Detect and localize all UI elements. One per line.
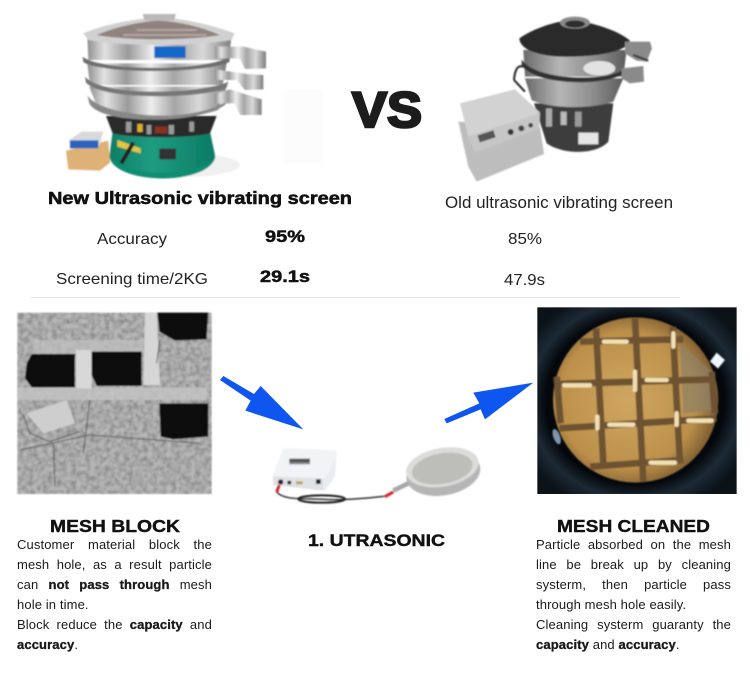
text block: mesh cleaned description: Cleaning systerm guaranty the <box>536 617 731 632</box>
heading: old screen: Old ultrasonic vibrating screen <box>445 194 673 212</box>
text block: mesh cleaned description: Particle absorbed on the mesh <box>536 537 731 552</box>
photo: ultrasonic generator and sieve <box>273 442 484 503</box>
heading: new screen: New Ultrasonic vibrating screen <box>48 188 352 208</box>
text block: mesh block description: hole in time. <box>17 597 89 612</box>
value: old screening time: 47.9s <box>504 272 545 289</box>
box and controller <box>66 141 110 171</box>
photo: cleaned mesh <box>537 307 737 494</box>
label: screening time: Screening time/2KG <box>56 271 208 288</box>
photo: new ultrasonic vibrating screen <box>66 14 323 178</box>
tiers <box>87 37 232 60</box>
text block: mesh block description: Block reduce the capacity and <box>17 617 212 632</box>
heading: VS: VS <box>352 82 422 138</box>
text block: mesh block description <box>17 537 212 652</box>
table: comparison values <box>56 227 545 289</box>
text block: mesh block description: accuracy. <box>17 637 78 652</box>
text block: mesh cleaned description: systerm, then particle pass <box>536 577 731 592</box>
text block: mesh cleaned description: capacity and accuracy. <box>536 637 680 652</box>
lid <box>83 17 235 45</box>
outlets <box>215 47 266 69</box>
text block: mesh cleaned description: through mesh hole easily. <box>536 597 686 612</box>
text block: mesh block description: mesh hole, as a result particle <box>17 557 212 572</box>
arrow: into ultrasonic <box>220 376 303 429</box>
text block: mesh cleaned description <box>536 537 731 652</box>
text block: mesh block description: can not pass through mesh <box>17 577 212 592</box>
value: new screening time: 29.1s <box>260 267 310 286</box>
label: ultrasonic: 1. UTRASONIC <box>308 531 445 550</box>
value: new accuracy: 95% <box>265 227 305 246</box>
label: accuracy: Accuracy <box>97 231 167 248</box>
value: old accuracy: 85% <box>508 231 542 248</box>
green base <box>109 132 215 178</box>
heading: mesh block: MESH BLOCK <box>50 516 180 536</box>
arrow: out of ultrasonic <box>444 383 533 423</box>
text block: mesh block description: Customer material block the <box>17 537 212 552</box>
photo: blocked mesh <box>17 313 212 494</box>
heading: mesh cleaned: MESH CLEANED <box>557 516 710 536</box>
text block: mesh cleaned description: line be break up by cleaning <box>536 557 731 572</box>
photo: old ultrasonic vibrating screen <box>458 17 652 182</box>
